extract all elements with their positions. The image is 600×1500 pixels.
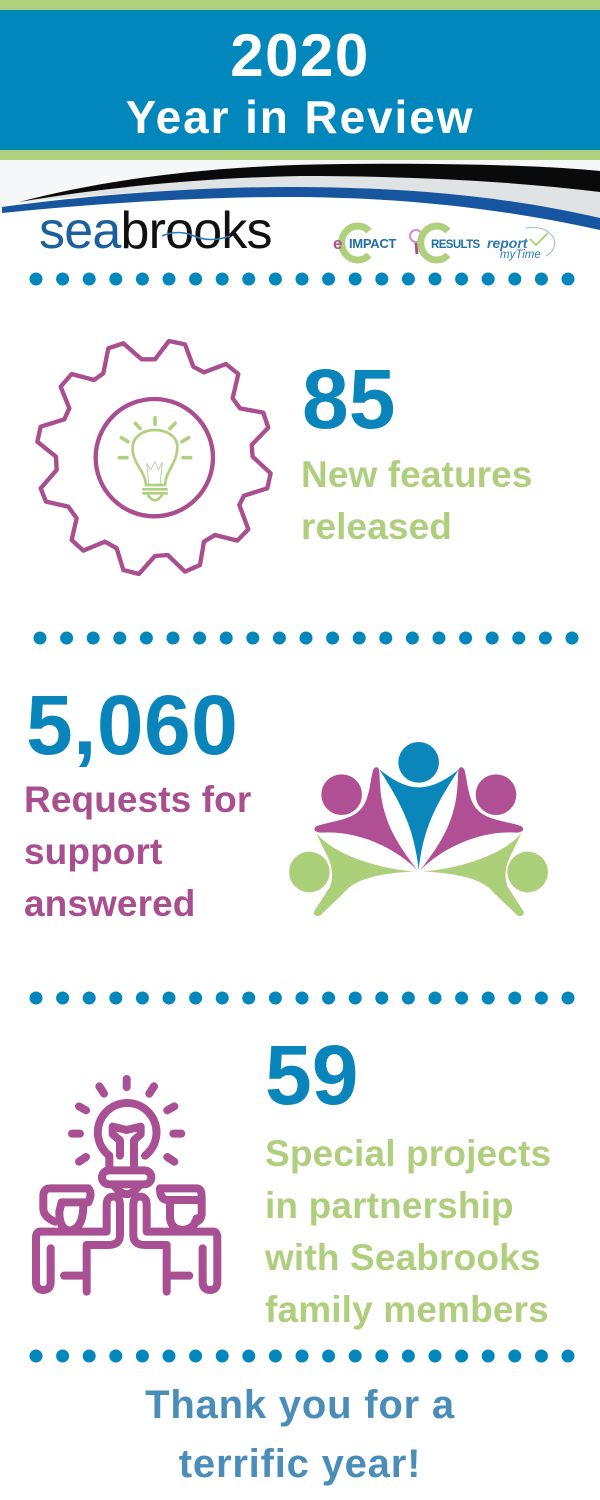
closing message: terrific year!: [179, 1442, 421, 1486]
logo: report myTime: [487, 227, 555, 261]
title: 2020: 2020: [230, 22, 370, 89]
icon: five people: [289, 742, 548, 916]
icon: gear with light bulb: [37, 341, 271, 574]
logo: seabrooks: seabrooks: [39, 202, 272, 260]
icon: team with light bulb: [36, 1079, 217, 1292]
logo: RESULTS: [410, 226, 481, 260]
logo: eIMPACT: [333, 226, 396, 260]
dotted divider 3: [36, 992, 569, 1004]
logo: report myTime: report: [487, 235, 529, 251]
logo: eIMPACT: IMPACT: [349, 236, 396, 251]
label: New features released: [301, 454, 533, 547]
label: Special projects in partnership: with Seabrooks: [264, 1237, 541, 1278]
title: Year in Review: Year in Review: [126, 91, 474, 143]
label: New features released: New features: [301, 454, 533, 495]
dotted divider 4: [36, 1350, 569, 1362]
header banner: [0, 0, 600, 160]
stat: 85: 85: [302, 352, 395, 446]
logo: report myTime: myTime: [500, 249, 541, 261]
logo: RESULTS: RESULTS: [431, 239, 481, 251]
label: New features released: released: [301, 506, 452, 547]
closing message: [145, 1383, 455, 1486]
label: Special projects in partnership: in partnership: [265, 1185, 514, 1226]
dotted divider 1: [36, 272, 569, 286]
swoosh graphic: [0, 160, 600, 240]
stat: 59: 59: [265, 1028, 358, 1122]
label: Requests for support answered: answered: [24, 883, 196, 924]
dotted divider 2: [40, 632, 573, 644]
label: Special projects in partnership: Special projects: [265, 1133, 551, 1174]
label: Special projects in partnership: [264, 1133, 551, 1330]
logo: eIMPACT: e: [333, 234, 342, 253]
label: Requests for support answered: Requests for: [24, 779, 251, 820]
stat: 5,060: 5,060: [26, 678, 238, 772]
closing message: Thank you for a: [145, 1383, 455, 1427]
label: Requests for support answered: support: [24, 831, 162, 872]
label: Special projects in partnership: family members: [265, 1289, 549, 1330]
label: Requests for support answered: [24, 779, 251, 924]
